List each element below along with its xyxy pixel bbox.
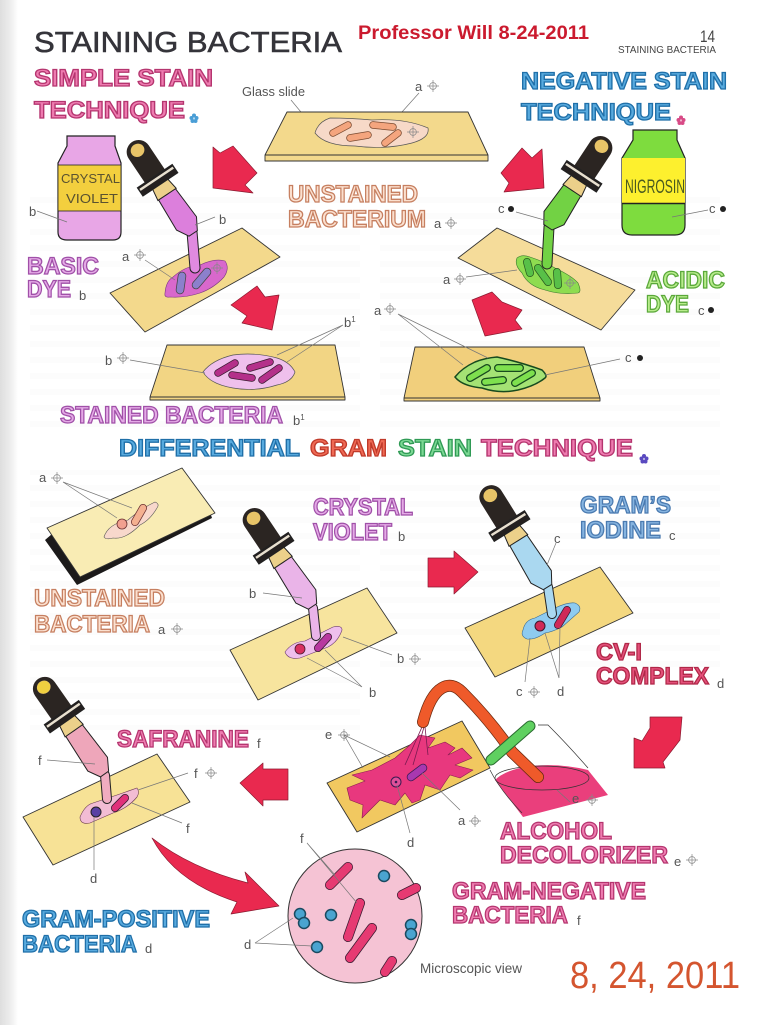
label: e crosshair: e [572,791,579,806]
label: a crosshair [422,773,481,828]
label: f [300,831,357,903]
heading: basic dye: BASIC [27,253,99,280]
panel: negative stain technique [374,68,727,401]
dropper: gram's iodine [467,476,565,614]
jar: nigrosin: NIGROSIN [625,177,685,198]
slide: stained bacteria [150,345,345,400]
heading: cv-i complex [596,639,709,690]
label: f smear [132,803,190,836]
heading: unstained bacterium: UNSTAINED [288,181,418,208]
heading: acidic dye [646,267,725,318]
label: b: b [398,529,405,544]
heading: safranine: SAFRANINE [117,726,249,753]
gram-negative rods [330,867,416,972]
heading: negative stain technique [521,68,727,126]
heading: differential gram stain technique: TECHNIQUE [481,435,633,462]
arrow: to simple stain [213,146,257,193]
label: d [397,785,414,850]
label: b for jar: b [29,204,36,219]
slide: safranine [23,754,190,865]
arrow: to stained slide [231,286,279,330]
label: a crosshair: a [415,79,423,94]
label: a crosshair [443,270,517,287]
label: c dot: c [625,350,632,365]
heading: gram's iodine: GRAM’S [580,492,671,519]
caption: microscopic view: Microscopic view [420,960,523,976]
heading: unstained bacterium: BACTERIUM [288,206,426,233]
arrow: to alcohol [634,717,682,768]
heading: alcohol decolorizer [500,818,668,869]
label: b crosshair: b [105,353,112,368]
label: b crosshair: b [397,651,404,666]
dropper: acidic dye [530,126,625,264]
heading: simple stain technique: TECHNIQUE [34,97,185,124]
heading: unstained bacteria [34,585,165,638]
heading: unstained bacteria: UNSTAINED [34,585,165,612]
label: a crosshair: a [158,622,166,637]
label: a crosshair: a [374,303,382,318]
label: a crosshair: a [122,249,130,264]
heading: negative stain technique: TECHNIQUE [521,99,671,126]
label: e crosshair [674,854,698,869]
slide: simple stain [110,228,280,332]
label: d: d [244,937,251,952]
label: b for jar [29,204,67,222]
heading: differential gram stain technique: DIFFERENTIAL [119,435,300,462]
arrow: to negative stain [501,148,544,192]
heading: crystal violet: VIOLET [313,519,392,546]
gram-positive cocci [294,870,416,952]
slide: crystal violet [230,588,397,700]
heading: gram's iodine: IODINE [580,517,661,544]
label: b prime [277,315,356,362]
panel: simple stain technique [27,65,356,429]
heading: cv-i complex: CV-I [596,639,642,666]
label: b prime: 1 [300,413,305,422]
label: a crosshair [434,216,457,231]
beaker: alcohol with wash tube [423,686,608,817]
heading: gram-negative bacteria: GRAM-NEGATIVE [452,878,646,905]
heading: crystal violet [313,494,413,546]
label: d: d [90,871,97,886]
label: a crosshair [374,303,488,365]
heading: simple stain technique [34,65,213,124]
label: f dropper [38,753,95,768]
label: c: c [554,531,561,546]
label: a crosshair [158,622,183,637]
icon: purple star marker [640,454,648,464]
label: d: d [145,941,152,956]
label: c dot left [498,201,548,221]
heading: gram-negative bacteria [452,878,646,929]
jar: crystal violet [58,136,121,240]
heading: basic dye: DYE [27,276,71,303]
slide: unstained bacterium [265,112,488,161]
label: c [547,531,561,565]
heading: unstained bacteria: BACTERIA [34,611,150,638]
title: STAINING BACTERIA [34,27,343,59]
label: f: f [577,913,581,928]
icon: blue star marker [190,114,198,123]
label: c dot left: c [498,201,505,216]
jar: nigrosin [622,130,685,235]
label: b prime: b [344,315,351,330]
label: b to dropper: b [249,586,256,601]
label: b: b [79,288,86,303]
heading: alcohol decolorizer: DECOLORIZER [500,842,668,869]
slide: gram's iodine [465,567,633,677]
heading: gram-positive bacteria: GRAM-POSITIVE [22,906,210,933]
arrow: to iodine [428,551,478,594]
handwritten date: 8, 24, 2011 [570,955,740,997]
author and date note: Professor Will 8-24-2011 [358,23,589,44]
label: f: f [257,736,261,751]
dropper: safranine [21,667,122,799]
label: c crosshair [516,638,540,699]
label: a crosshair [122,249,175,280]
label: a crosshair: a [443,272,451,287]
label: d [90,817,97,886]
label: a crosshair [39,470,132,518]
label: f: f [300,831,304,846]
label: b to cells [307,650,376,700]
label: b crosshair [105,352,205,373]
label: d: d [717,676,724,691]
jar: crystal violet: CRYSTAL [61,171,120,186]
slide: negative stain [458,228,635,330]
label: d: d [557,684,564,699]
heading: gram-negative bacteria: BACTERIA [452,902,568,929]
running header: STAINING BACTERIA [618,45,716,56]
arrow: to microscopic view [152,838,279,914]
label: e crosshair: e [674,854,681,869]
label: e crosshair top: e [325,727,332,742]
label: glass slide [242,84,310,123]
heading: acidic dye: DYE [646,291,689,318]
label: b for dropper: b [219,212,226,227]
label: d [545,627,564,699]
label: c crosshair: c [516,684,523,699]
label: e crosshair [557,790,598,806]
label: a crosshair: a [434,216,442,231]
label: a crosshair [393,79,439,122]
icon: pink star marker [676,116,686,125]
jar: crystal violet: VIOLET [66,191,118,206]
heading: unstained bacterium [288,181,426,233]
dropper: crystal violet [231,498,330,636]
heading: crystal violet: CRYSTAL [313,494,413,521]
heading: basic dye [27,253,99,303]
panel: unstained bacterium [213,79,544,336]
heading: simple stain technique: SIMPLE STAIN [34,65,213,92]
label: f dropper: f [38,753,42,768]
heading: alcohol decolorizer: ALCOHOL [500,818,612,845]
page number: 14 [700,27,715,46]
heading: negative stain technique: NEGATIVE STAIN [521,68,727,95]
heading: stained bacteria: STAINED BACTERIA [60,402,283,429]
heading: gram's iodine [580,492,671,544]
label: c: c [669,528,676,543]
heading: cv-i complex: COMPLEX [596,663,709,690]
label: b for dropper [195,212,226,227]
label: c dot right [672,201,726,217]
arrow: to safranine [240,763,288,806]
heading: acidic dye: ACIDIC [646,267,725,294]
label: d: d [407,835,414,850]
label: b crosshair [343,637,421,666]
microscope circle [288,849,422,983]
heading: differential gram stain technique [119,435,633,462]
label: c dot right: c [709,201,716,216]
dropper: basic dye [115,130,211,268]
heading: gram-positive bacteria [22,906,210,958]
label: d [244,918,312,952]
label: c dot [698,303,714,318]
label: e crosshair top [325,727,390,768]
heading: gram-positive bacteria: BACTERIA [22,931,137,958]
label: glass slide: Glass slide [242,84,305,99]
heading: differential gram stain technique: GRAM [310,435,387,462]
label: b prime: b [293,413,300,428]
panel: microscopic view [22,831,646,983]
label: b to cells: b [369,685,376,700]
label: f crosshair: f [194,766,198,781]
slide: unstained gram [45,468,215,585]
slide: negative result [404,347,600,401]
label: b to dropper [249,586,302,601]
label: c dot [545,350,643,375]
label: c dot: c [698,303,705,318]
label: a crosshair: a [458,813,466,828]
label: a crosshair: a [39,470,47,485]
label: b prime: 1 [351,315,356,324]
arrow: to negative result [472,292,522,336]
heading: differential gram stain technique: STAIN [398,435,472,462]
label: f smear: f [186,821,190,836]
panel: gram stain steps [21,468,724,914]
slide: alcohol decolorizer [327,721,490,832]
label: f crosshair [138,766,217,790]
